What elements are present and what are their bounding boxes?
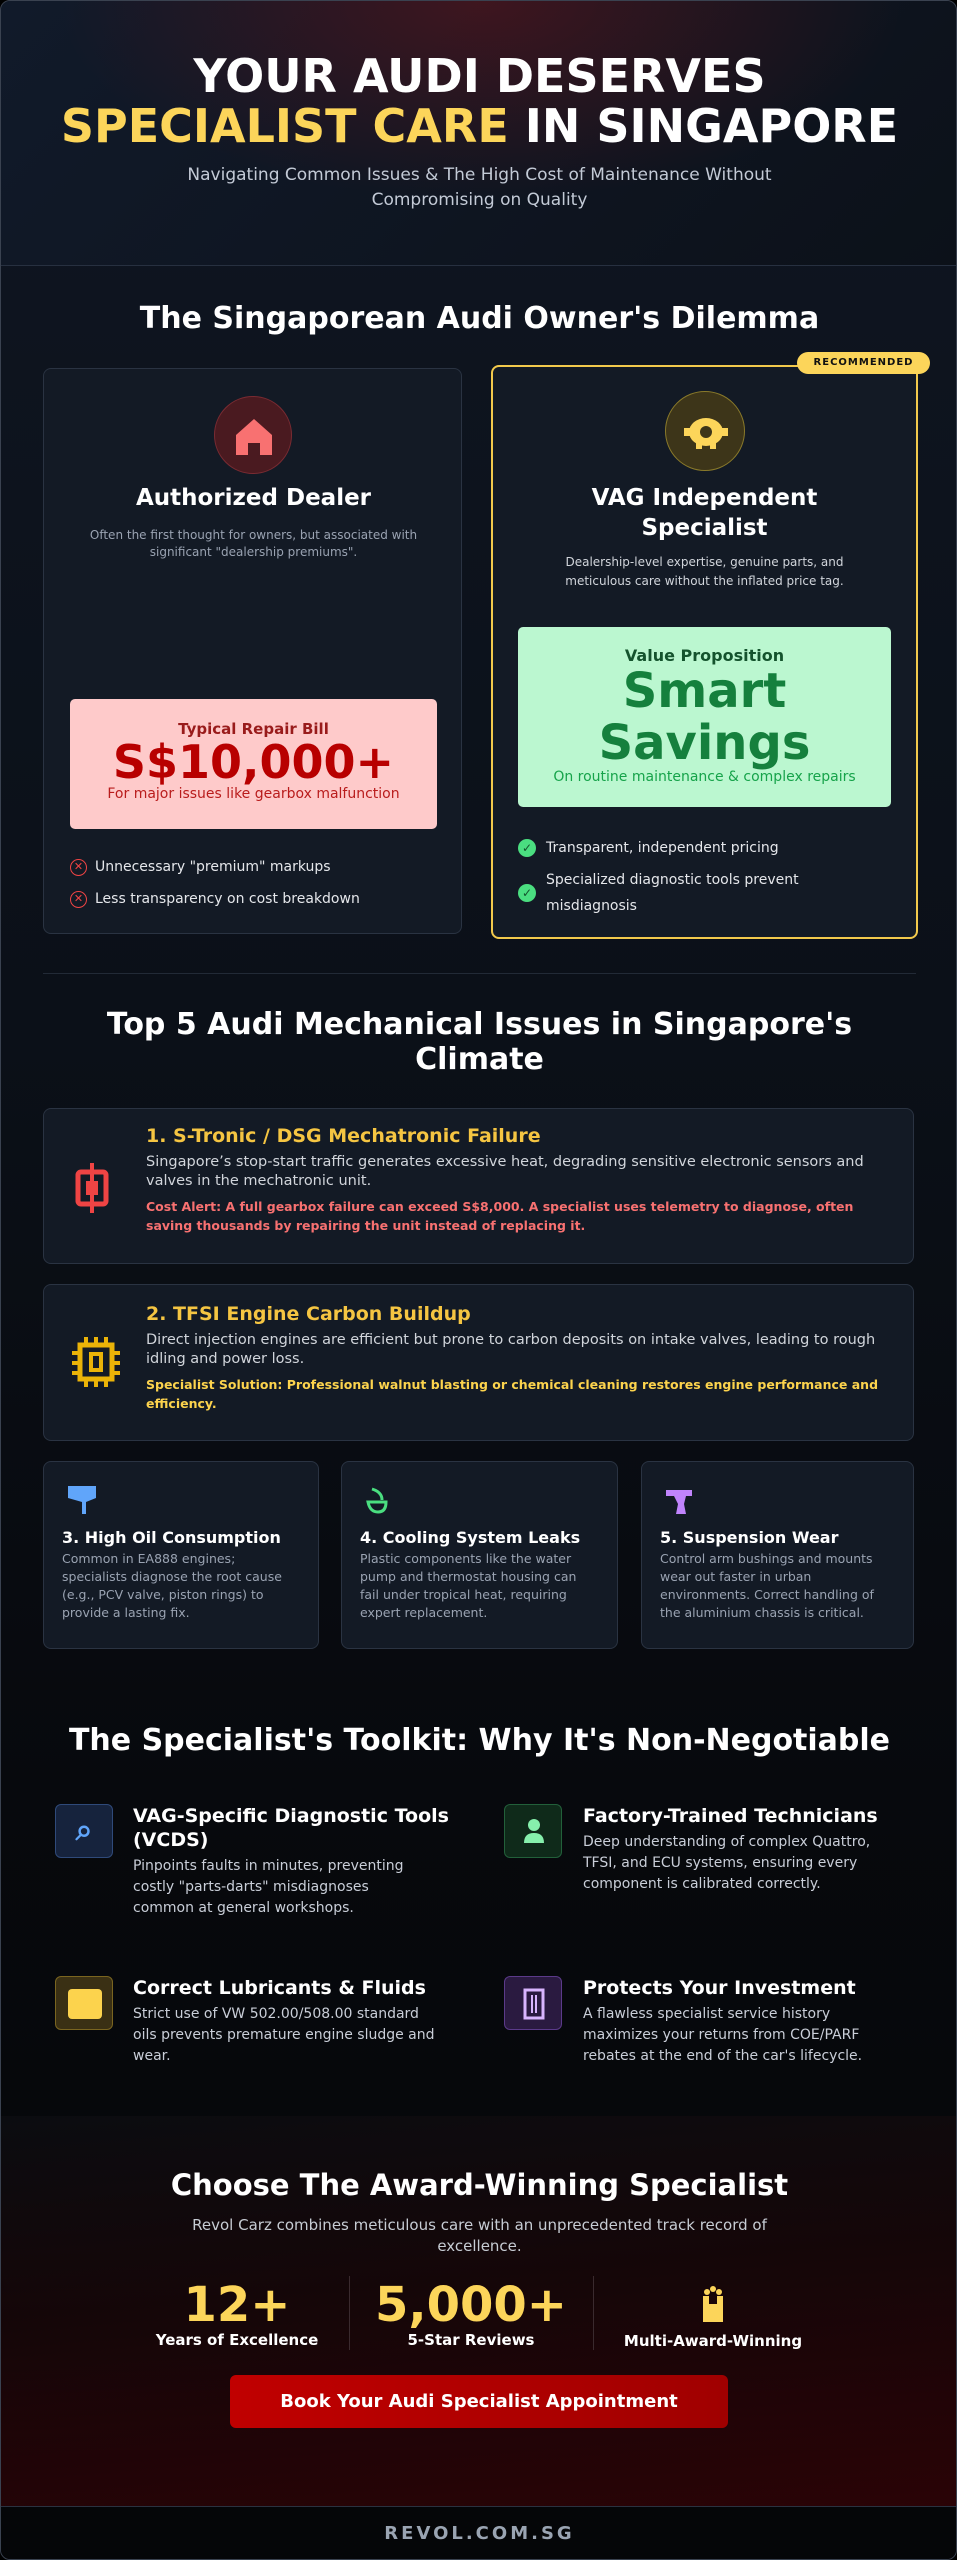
- item: VCDS: Pinpoints faults in minutes, preventing costly "parts-darts" misdiagnoses common at general workshops.: [133, 1858, 404, 1916]
- callout: smart savings: Smart: [623, 663, 786, 719]
- icon: person: [504, 1804, 562, 1858]
- heading: toolkit: The Specialist's Toolkit: Why It's Non-Negotiable: [69, 1723, 890, 1758]
- stat: reviews: 5,000+: [375, 2277, 567, 2333]
- list: pros: ✓: [522, 841, 532, 855]
- text: Dealership-level expertise, genuine parts, and meticulous care without the inflated price tag.: [565, 555, 844, 588]
- item: technicians: Factory-Trained Technicians: [583, 1805, 878, 1827]
- item: lubricants: Correct Lubricants & Fluids: [133, 1977, 426, 1999]
- text: [146, 1303, 878, 1411]
- heading: [592, 485, 817, 541]
- text: [146, 1125, 864, 1233]
- item: VCDS: VAG-Specific Diagnostic Tools (VCDS): [133, 1805, 449, 1851]
- panel: issue 3: Common in EA888 engines; specialists diagnose the root cause (e.g., PCV valve, piston rings) to provide a lasting fix.: [62, 1551, 282, 1620]
- title: SPECIALIST CARE IN SINGAPORE: [61, 99, 898, 153]
- section: CTA: [1, 2116, 957, 2506]
- text: Cost Alert: A full gearbox failure can exceed S$8,000. A specialist uses telemetry to diagnose, often saving thousands by repairing the unit instead of replacing it.: [146, 1199, 853, 1233]
- text: 1. S-Tronic / DSG Mechatronic Failure: [146, 1125, 541, 1147]
- heading: VAG Independent: [592, 485, 817, 511]
- item: VCDS: [55, 1804, 449, 1916]
- heading: Specialist: [641, 515, 768, 541]
- icon: chip: [72, 1337, 120, 1387]
- stat: years: Years of Excellence: [156, 2331, 318, 2349]
- item: technicians: Deep understanding of complex Quattro, TFSI, and ECU systems, ensuring every component is calibrated correctly.: [583, 1834, 870, 1892]
- callout: smart savings: Savings: [599, 715, 810, 771]
- panel: issue 5: Control arm bushings and mounts wear out faster in urban environments. Correct handling of the aluminium chassis is critical.: [660, 1551, 874, 1620]
- icon: diagnostic: ⌕: [76, 1813, 92, 1848]
- icon: piggy bank: [665, 391, 745, 471]
- text: Revol Carz combines meticulous care with an unprecedented track record of excellence.: [192, 2216, 767, 2255]
- item: investment: [504, 1976, 862, 2064]
- text: Direct injection engines are efficient but prone to carbon deposits on intake valves, leading to rough idling and power loss.: [146, 1332, 875, 1367]
- text: Often the first thought for owners, but associated with significant "dealership premiums".: [90, 528, 417, 559]
- title: [61, 49, 898, 153]
- list: pros: [518, 839, 799, 914]
- icon: diagnostic: [55, 1804, 113, 1858]
- title: YOUR AUDI DESERVES: [193, 49, 766, 103]
- stat: award: [624, 2286, 802, 2350]
- panel: issue 3: 3. High Oil Consumption: [62, 1528, 281, 1547]
- panel: authorized dealer: [43, 368, 462, 934]
- list: pros: Transparent, independent pricing: [546, 840, 779, 856]
- footer: REVOL.COM.SG: [384, 2523, 575, 2544]
- subtitle: Navigating Common Issues & The High Cost of Maintenance Without Compromising on Quality: [187, 165, 772, 210]
- stat: award: Multi-Award-Winning: [624, 2332, 802, 2350]
- icon: oil can: [55, 1976, 113, 2030]
- icon: mechatronic: [76, 1163, 108, 1213]
- item: investment: Protects Your Investment: [583, 1977, 856, 1999]
- button: book: Book Your Audi Specialist Appointment: [280, 2391, 678, 2412]
- list: cons: Unnecessary "premium" markups: [95, 859, 331, 875]
- item: investment: A flawless specialist service history maximizes your returns from COE/PARF rebates at the end of the car's lifecycle.: [583, 2006, 862, 2064]
- callout: smart savings: [518, 627, 891, 807]
- panel: issue 1: [43, 1108, 914, 1264]
- icon: vault: [504, 1976, 562, 2030]
- header background: [1, 1, 957, 266]
- list: cons: [70, 859, 360, 908]
- text: Singapore’s stop-start traffic generates excessive heat, degrading sensitive electronic sensors and valves in the mechatronic unit.: [146, 1154, 864, 1189]
- list: cons: ✕: [74, 860, 83, 872]
- callout: repair bill: Typical Repair Bill: [178, 720, 329, 738]
- heading: dilemma: The Singaporean Audi Owner's Dilemma: [140, 301, 819, 336]
- stat: reviews: 5-Star Reviews: [408, 2331, 534, 2349]
- callout: repair bill: For major issues like gearbox malfunction: [107, 786, 400, 802]
- icon: coolant: [366, 1488, 388, 1514]
- icon: oil: [68, 1486, 96, 1514]
- list: pros: Specialized diagnostic tools prevent misdiagnosis: [546, 872, 799, 914]
- panel: issue 4: 4. Cooling System Leaks: [360, 1528, 580, 1547]
- callout: smart savings: Value Proposition: [625, 646, 784, 665]
- icon: house: [214, 396, 292, 474]
- text: 2. TFSI Engine Carbon Buildup: [146, 1303, 471, 1325]
- footer: [1, 2506, 957, 2560]
- item: lubricants: Strict use of VW 502.00/508.00 standard oils prevents premature engine sludge and wear.: [133, 2006, 435, 2064]
- list: cons: ✕: [74, 892, 83, 904]
- heading: Authorized Dealer: [136, 485, 371, 511]
- panel: issue 4: Plastic components like the water pump and thermostat housing can fail under tropical heat, requiring expert replacement.: [360, 1551, 576, 1620]
- panel: VAG specialist: [491, 365, 918, 939]
- heading: Choose The Award-Winning Specialist: [171, 2168, 788, 2202]
- item: technicians: [504, 1804, 878, 1892]
- list: cons: Less transparency on cost breakdown: [95, 891, 360, 907]
- stat: years: 12+: [183, 2277, 290, 2333]
- heading: top 5: [107, 1007, 852, 1077]
- panel: issue 5: 5. Suspension Wear: [660, 1528, 838, 1547]
- panel: issue 2: [43, 1284, 914, 1441]
- callout: repair bill: S$10,000+: [113, 735, 394, 789]
- callout: smart savings: On routine maintenance & complex repairs: [553, 769, 856, 785]
- badge: recommended: RECOMMENDED: [814, 357, 913, 368]
- item: lubricants: [55, 1976, 435, 2064]
- text: Specialist Solution: Professional walnut blasting or chemical cleaning restores engine performance and efficiency.: [146, 1377, 878, 1411]
- list: pros: ✓: [522, 886, 532, 900]
- callout: repair bill: [70, 699, 437, 829]
- icon: suspension: [666, 1490, 692, 1514]
- stat: years: [156, 2277, 318, 2349]
- badge: recommended: [797, 352, 930, 374]
- panel: issue 4: [341, 1461, 618, 1649]
- heading: top 5: Top 5 Audi Mechanical Issues in Singapore's: [107, 1007, 852, 1042]
- panel: issue 5: [641, 1461, 914, 1649]
- button: book: [230, 2375, 728, 2428]
- panel: issue 3: [43, 1461, 319, 1649]
- heading: top 5: Climate: [415, 1042, 544, 1077]
